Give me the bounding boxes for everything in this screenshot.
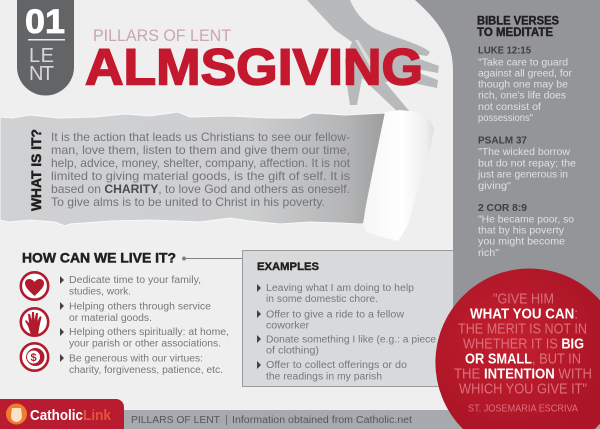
examples heading: EXAMPLES [257, 261, 319, 273]
what is it label: WHAT IS IT? [28, 129, 44, 211]
verse: 2 Cor 8:9: that by his poverty [478, 226, 564, 236]
verse: Luke 12:15: possessions" [478, 113, 533, 124]
verses heading: BIBLE VERSES [477, 16, 559, 28]
torn grey band [0, 112, 385, 226]
examples list: the readings in my parish [266, 372, 382, 382]
definition text: man, love them, listen to them and give them our time, [51, 143, 350, 157]
panel: examples [242, 250, 454, 386]
badge: 01 Lent: 01 [25, 3, 65, 41]
examples list: Offer to give a ride to a fellow [266, 310, 405, 320]
footer bar: PILLARS OF LENT [131, 415, 220, 426]
quote text: "GIVE HIM [493, 292, 554, 308]
quote circle [435, 268, 600, 429]
verse: 2 Cor 8:9 [478, 203, 574, 259]
verse: Psalm 37: giving" [478, 181, 511, 192]
icon: open hand [21, 308, 48, 336]
definition text: based on CHARITY, to love God and others as oneself. [51, 182, 350, 196]
panel: what is it band [0, 110, 434, 241]
verse: 2 Cor 8:9: you might become [478, 236, 565, 248]
verse: Psalm 37: just are generous in [477, 170, 568, 180]
quote text: WHETHER IT IS BIG [463, 336, 584, 352]
quote text: WHAT YOU CAN: [470, 306, 578, 322]
examples list [257, 283, 436, 382]
verse: Psalm 37: "The wicked borrow [478, 147, 571, 158]
logo: Catholic Link: Catholic [30, 407, 83, 424]
logo: Catholic Link: Link [83, 407, 112, 424]
verse: 2 Cor 8:9: 2 COR 8:9 [478, 203, 527, 214]
footer bar: Information obtained from Catholic.net [232, 415, 412, 426]
quote text: OR SMALL, BUT IN [465, 352, 581, 368]
icon: heart [21, 272, 48, 300]
verse: 2 Cor 8:9: rich" [478, 248, 499, 259]
panel: bible verses background [415, 0, 600, 410]
list: ways to live it: Helping others through service [69, 302, 211, 312]
examples list: in some domestic chore. [266, 294, 378, 305]
icon: shadow of reaching hand [307, 0, 439, 112]
definition text: help, advice, money, shelter, company, affection. It is not [51, 156, 351, 170]
list: ways to live it: or material goods. [69, 313, 152, 324]
quote attribution: ST. JOSEMARIA ESCRIVA [468, 404, 578, 414]
quote text: WHICH YOU GIVE IT" [459, 382, 587, 398]
badge: 01 Lent: NT [29, 63, 54, 85]
subtitle: PILLARS OF LENT [93, 27, 231, 45]
verse: Psalm 37 [477, 136, 576, 192]
verse: Luke 12:15: rich, one's life does [478, 90, 566, 102]
verse: Luke 12:15: against all greed, for [478, 68, 573, 80]
icon: coin [21, 343, 48, 371]
quote text: THE INTENTION WITH [454, 366, 592, 382]
panel: bible verses text [477, 16, 576, 259]
examples list: Leaving what I am doing to help [266, 283, 414, 294]
definition text: To give alms is to be united to Christ in his poverty. [51, 195, 325, 209]
verse: Luke 12:15: not consist of [478, 102, 541, 113]
title: ALMSGIVING [85, 38, 423, 96]
footer bar [0, 410, 600, 429]
list: ways to live it: Dedicate time to your family, [69, 275, 201, 286]
examples list: coworker [266, 320, 310, 332]
curled paper roll [363, 110, 434, 241]
examples list: Donate something I like (e.g.: a piece [266, 334, 436, 346]
badge: 01 Lent [17, 0, 74, 96]
verse: Luke 12:15: though one may be [478, 80, 568, 90]
verses heading [477, 16, 559, 39]
verse: Luke 12:15 [478, 46, 573, 124]
verse: Luke 12:15: LUKE 12:15 [478, 46, 531, 56]
list: ways to live it: studies, work. [69, 286, 131, 298]
heading: how can we live it: HOW CAN WE LIVE IT? [22, 250, 176, 266]
verses heading: TO MEDITATE [477, 27, 553, 39]
verse: 2 Cor 8:9: "He became poor, so [478, 214, 574, 226]
definition text: limited to giving material goods, is the gift of self. It is [51, 169, 350, 183]
examples list: of clothing) [266, 346, 319, 356]
list: ways to live it: Be generous with our virtues: [69, 354, 203, 364]
verse: Luke 12:15: "Take care to guard [478, 58, 568, 68]
list: ways to live it: charity, forgiveness, patience, etc. [69, 365, 223, 376]
examples list: Offer to collect offerings or do [266, 360, 407, 371]
badge: 01 Lent: LE [29, 45, 54, 67]
quote text [454, 292, 592, 398]
list: ways to live it: Helping others spiritually: at home, [69, 327, 229, 338]
verse: Psalm 37: PSALM 37 [478, 136, 527, 146]
verse: Psalm 37: but do not repay; the [478, 158, 576, 170]
icon: coin: $ [30, 352, 37, 364]
definition text: It is the action that leads us Christians to see our fellow- [51, 130, 350, 144]
list: ways to live it: your parish or other associations. [69, 338, 221, 350]
definition text [51, 130, 351, 209]
list: ways to live it [60, 275, 229, 376]
logo: Catholic Link [0, 399, 124, 429]
